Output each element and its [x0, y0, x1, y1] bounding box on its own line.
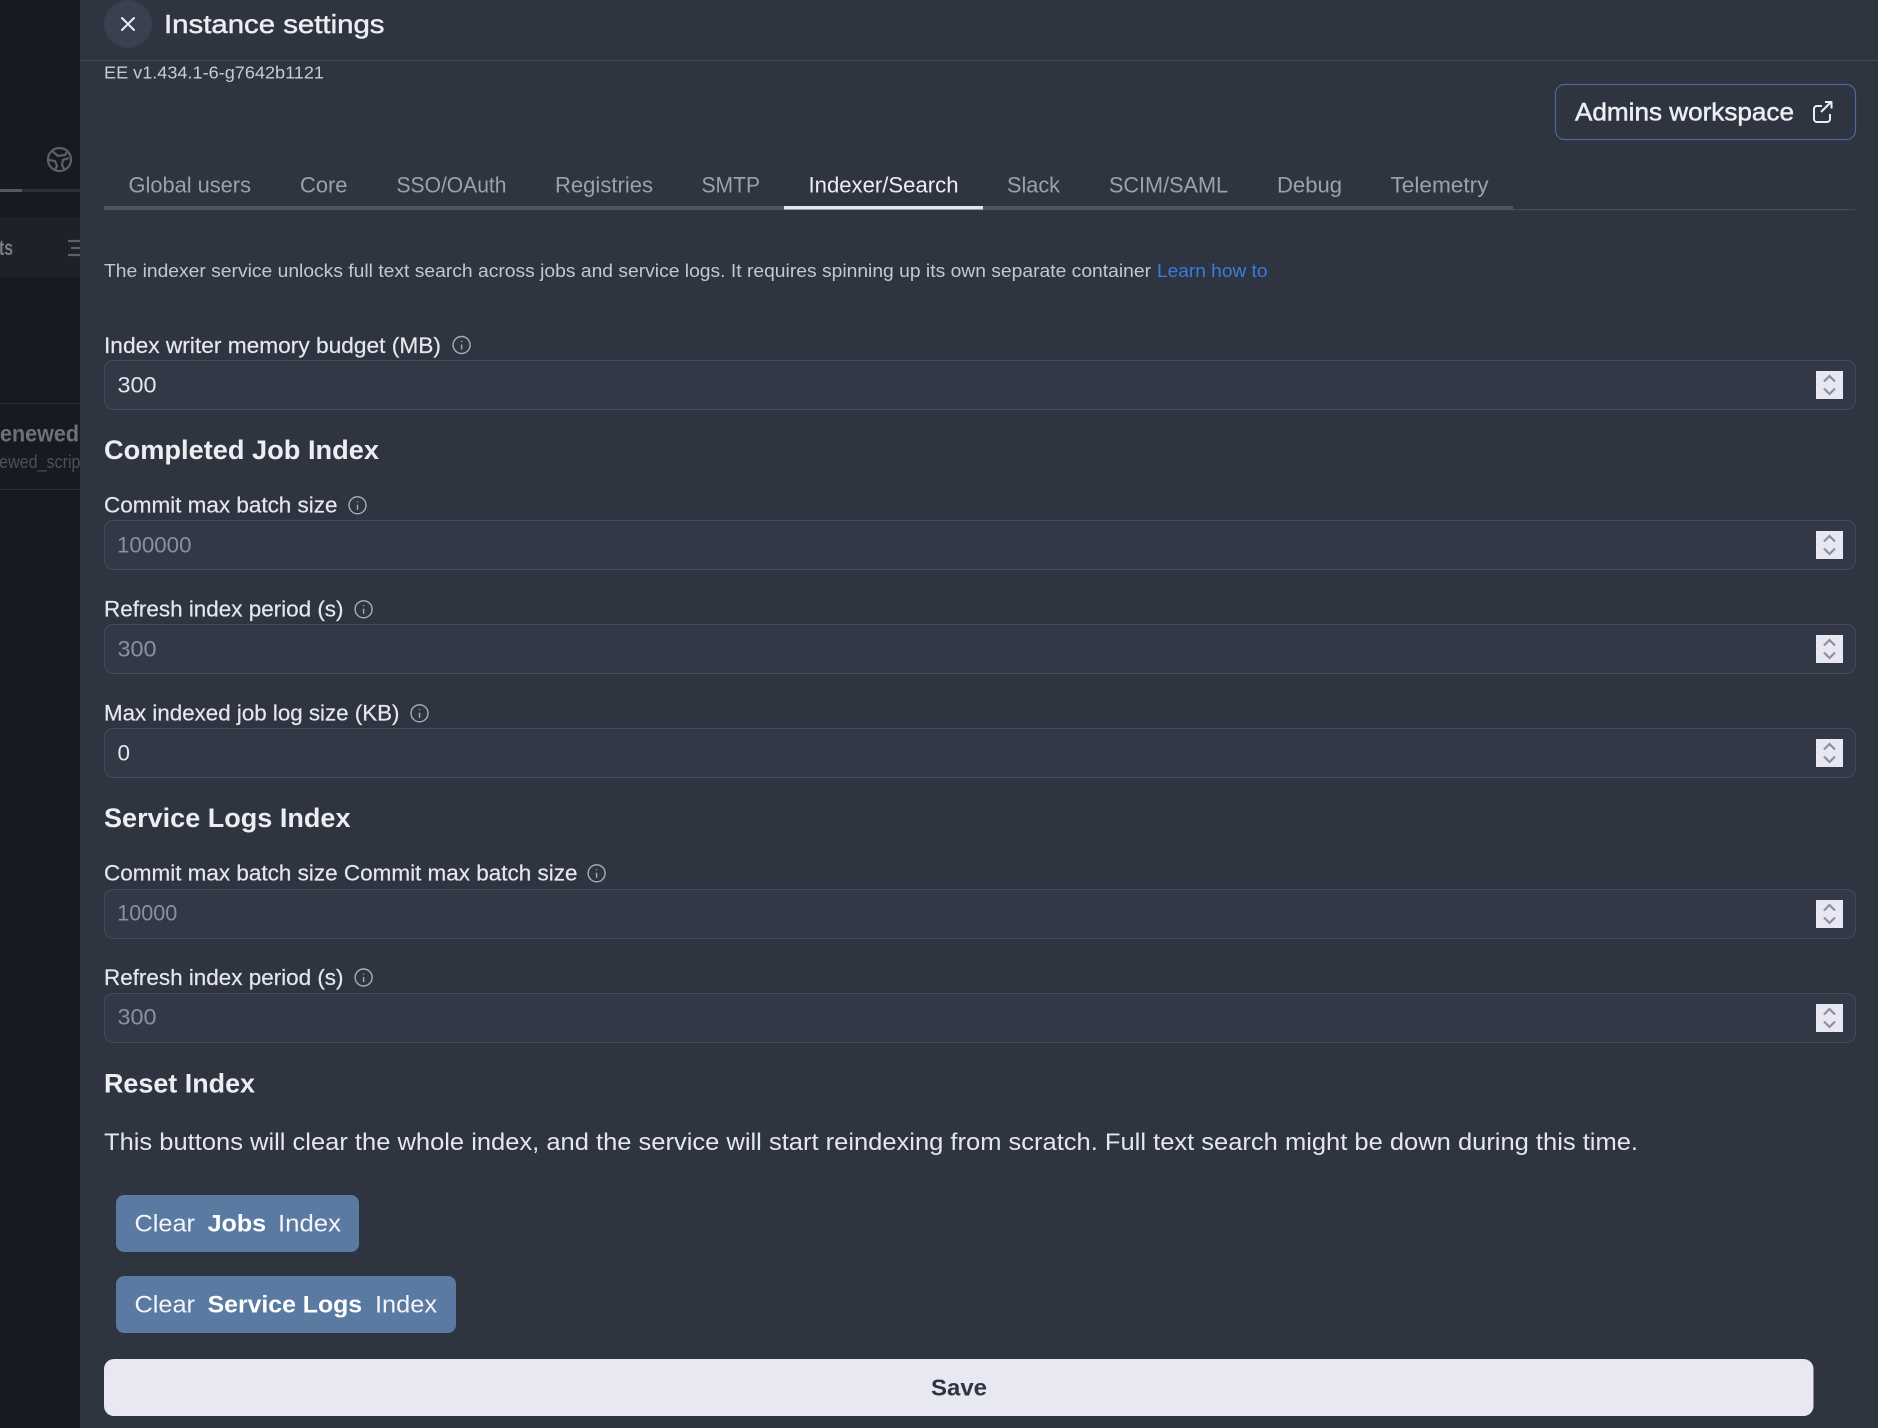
description: The indexer service unlocks full text search across jobs and service logs. It requires spinning up its own separate container — [104, 260, 1151, 281]
button: clear service logs index: Clear — [134, 1292, 195, 1319]
tabs: Telemetry — [1390, 172, 1488, 198]
heading: reset index: Reset Index — [104, 1069, 255, 1099]
button: clear service logs index: Index — [375, 1292, 437, 1319]
button: clear jobs index: Index — [278, 1211, 341, 1238]
field: commit max batch size: Commit max batch size — [104, 493, 338, 518]
field: max indexed job log size — [104, 701, 1856, 778]
version: EE v1.434.1-6-g7642b1121 — [104, 62, 324, 82]
field: max indexed job log size: Max indexed job log size (KB) — [104, 701, 400, 726]
button: clear service logs index: Service Logs — [208, 1292, 362, 1319]
tabs: Debug — [1277, 172, 1342, 198]
field: max indexed job log size: 0 — [118, 741, 130, 766]
field: service logs refresh index period: 300 — [118, 1004, 156, 1030]
tabs: SCIM/SAML — [1109, 172, 1228, 198]
sidebar script path: ewed_script — [0, 452, 85, 473]
field: service logs refresh index period — [104, 965, 1856, 1042]
title: Instance settings — [164, 9, 384, 39]
tabs: Indexer/Search — [808, 172, 958, 198]
field: index writer memory budget: Index writer memory budget (MB) — [104, 333, 441, 358]
field: refresh index period: 300 — [118, 637, 156, 662]
description: Learn how to — [1157, 260, 1268, 281]
tabs: Global users — [128, 172, 251, 198]
field: service logs refresh index period: Refresh index period (s) — [104, 965, 344, 990]
field: commit max batch size — [104, 493, 1856, 570]
heading: completed job index: Completed Job Index — [104, 435, 379, 465]
tabs: Registries — [555, 172, 653, 198]
sidebar script name: enewed — [0, 421, 79, 447]
field: service logs commit max batch size: 10000 — [117, 900, 177, 926]
button: save — [104, 1359, 1814, 1416]
tabs: SMTP — [702, 172, 760, 198]
field: refresh index period: Refresh index period (s) — [104, 597, 344, 622]
field: commit max batch size: 100000 — [117, 533, 192, 558]
button: clear service logs index — [116, 1276, 456, 1333]
field: index writer memory budget — [104, 333, 1856, 410]
icon: globe — [48, 148, 71, 171]
reset paragraph: This buttons will clear the whole index, and the service will start reindexing from scratch. Full text search might be down during this time. — [104, 1129, 1638, 1156]
sidebar: dimmed background app — [0, 0, 85, 1428]
tabs — [104, 172, 1855, 210]
tabs: Slack — [1007, 172, 1061, 198]
field: service logs commit max batch size — [104, 861, 1856, 938]
field: refresh index period — [104, 597, 1856, 674]
field: service logs commit max batch size: Commit max batch size Commit max batch size — [104, 861, 578, 886]
button: admins workspace — [1556, 84, 1856, 140]
field: index writer memory budget: 300 — [118, 373, 156, 398]
close button — [104, 0, 152, 48]
button: admins workspace: Admins workspace — [1575, 98, 1794, 126]
tabs: Core — [300, 172, 348, 198]
button: clear jobs index: Jobs — [208, 1211, 266, 1238]
button: clear jobs index — [116, 1195, 359, 1252]
button: clear jobs index: Clear — [134, 1211, 195, 1238]
heading: service logs index: Service Logs Index — [104, 803, 350, 833]
button: save: Save — [931, 1374, 987, 1400]
tabs: SSO/OAuth — [396, 172, 506, 198]
icon: list — [68, 241, 82, 255]
